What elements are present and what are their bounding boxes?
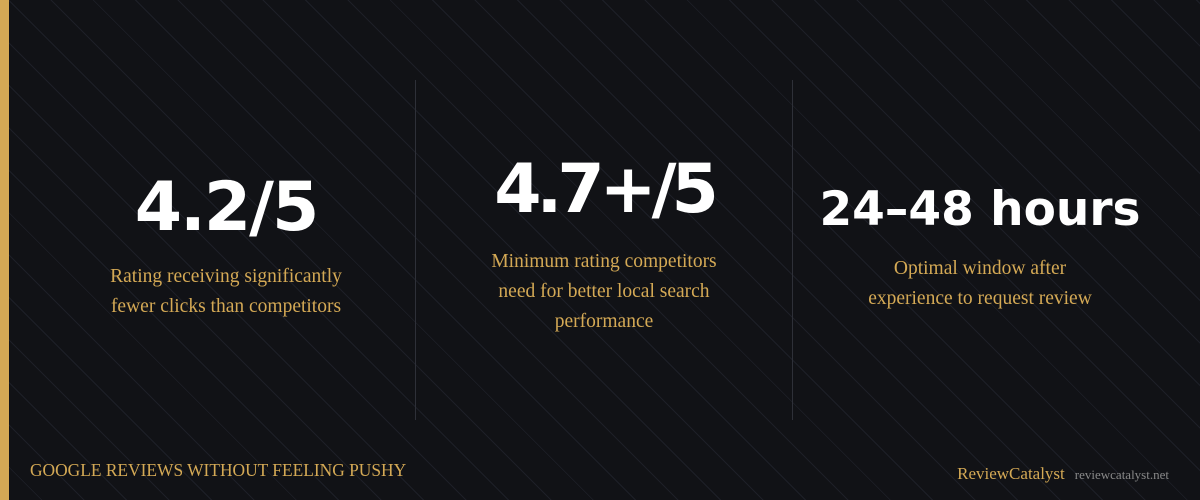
stat 3: Optimal window after bbox=[894, 258, 1066, 279]
stat 2: Minimum rating competitors bbox=[491, 251, 717, 272]
stat 3 bbox=[819, 182, 1141, 309]
stat 2: performance bbox=[555, 311, 653, 332]
footer brand: ReviewCatalyst reviewcatalyst.net bbox=[957, 464, 1169, 483]
stat 2: need for better local search bbox=[498, 281, 710, 302]
stat 3: 24–48 hours bbox=[819, 182, 1141, 237]
stat 1: Rating receiving significantly bbox=[110, 266, 342, 287]
stat 1: fewer clicks than competitors bbox=[111, 296, 341, 317]
stat 2 bbox=[491, 150, 717, 332]
stat 2: 4.7+/5 bbox=[494, 150, 714, 229]
stat 1 bbox=[110, 168, 342, 317]
accent bar bbox=[0, 0, 9, 500]
stat 3: experience to request review bbox=[868, 288, 1092, 309]
footer title: GOOGLE REVIEWS WITHOUT FEELING PUSHY bbox=[30, 460, 406, 480]
stat 1: 4.2/5 bbox=[135, 168, 317, 247]
